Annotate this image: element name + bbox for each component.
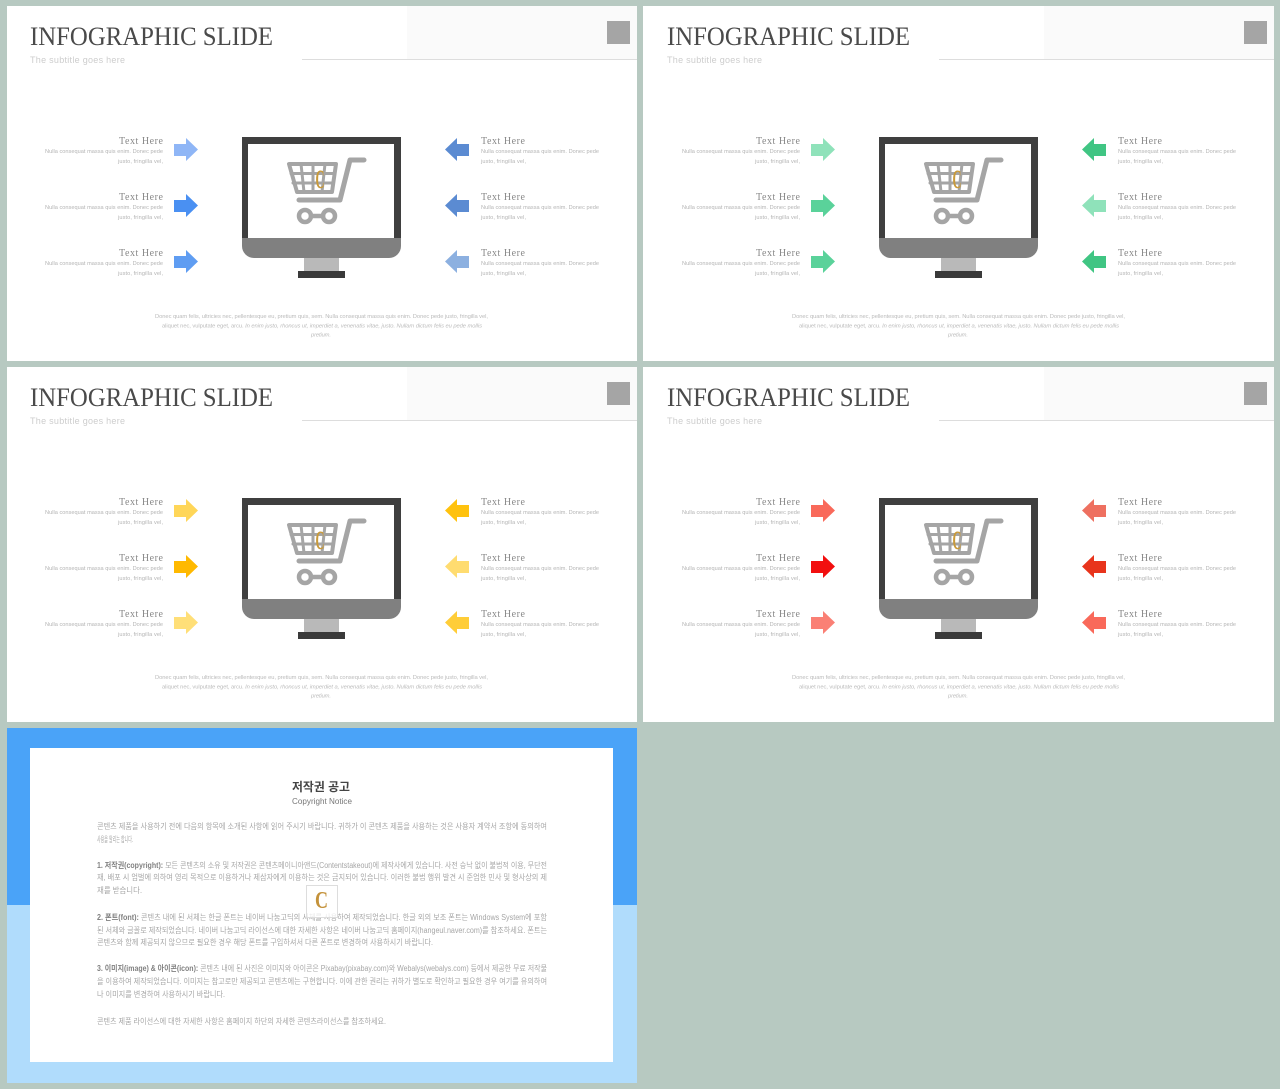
item right 3: justo, fringilla vel, (480, 632, 526, 638)
intro text (97, 821, 547, 844)
panel: yellow slide (7, 367, 637, 722)
item left 3: Text Here (119, 248, 164, 259)
item right 3 (445, 248, 599, 277)
item right 3 (445, 609, 599, 638)
item right 1 (445, 136, 599, 165)
item right 2: justo, fringilla vel, (480, 215, 526, 221)
item left 3: Nulla consequat massa quis enim. Donec pede (682, 622, 800, 628)
item left 2: Text Here (119, 192, 164, 203)
item right 2: Nulla consequat massa quis enim. Donec pede (1118, 205, 1236, 211)
item right 2 (1082, 192, 1236, 221)
title: INFOGRAPHIC SLIDE (667, 382, 910, 412)
item right 2: Text Here (1118, 553, 1163, 564)
footer text: Donec quam felis, ultricies nec, pellentesque eu, pretium quis, sem. Nulla consequat massa quis enim. Donec pede justo, fringilla vel, (155, 675, 488, 681)
item right 2: Text Here (1118, 192, 1163, 203)
grey square icon (1244, 382, 1267, 405)
item right 3 (1082, 609, 1236, 638)
intro text: 콘텐츠 제품을 사용하기 전에 다음의 항목에 소개된 사항에 읽어 주시기 바랍니다. 귀하가 이 콘텐츠 제품을 사용하는 것은 사용자 계약서 조항에 동의하여 (97, 821, 547, 831)
item left 1: Nulla consequat massa quis enim. Donec pede (682, 510, 800, 516)
panel: blue slide: C (316, 165, 324, 194)
item left 3 (682, 248, 835, 277)
footer text: aliquet nec, vulputate eget, arcu. In enim justo, rhoncus ut, imperdiet a, venenatis vitae, justo. Nullam dictum felis eu pede mollis (799, 684, 1119, 690)
item left 2: Text Here (119, 553, 164, 564)
item left 2: justo, fringilla vel, (754, 576, 800, 582)
panel: copyright notice slide (7, 728, 637, 1083)
icon: monitor with cart (242, 137, 401, 278)
footer text: aliquet nec, vulputate eget, arcu. In enim justo, rhoncus ut, imperdiet a, venenatis vitae, justo. Nullam dictum felis eu pede mollis (799, 324, 1119, 330)
footer text: Donec quam felis, ultricies nec, pellentesque eu, pretium quis, sem. Nulla consequat massa quis enim. Donec pede justo, fringilla vel, (792, 314, 1125, 320)
item left 1: justo, fringilla vel, (117, 520, 163, 526)
item left 3 (45, 609, 198, 638)
item left 1: justo, fringilla vel, (754, 159, 800, 165)
item right 2: Nulla consequat massa quis enim. Donec pede (481, 566, 599, 572)
title: INFOGRAPHIC SLIDE (30, 21, 273, 51)
item left 3 (45, 248, 198, 277)
item left 3: Text Here (119, 609, 164, 620)
item left 3: Nulla consequat massa quis enim. Donec pede (45, 622, 163, 628)
section: copyright: 재, 배포 시 엄벌에 의하여 영리 목적으로 이용하거나 제삼자에게 이용하는 것은 금지되어 있습니다. 이러한 불법 행위 발견 시 준엄한 민사 및 형사상의 제 (97, 872, 547, 882)
item left 3: justo, fringilla vel, (117, 632, 163, 638)
item right 3: justo, fringilla vel, (1117, 632, 1163, 638)
item left 2: justo, fringilla vel, (117, 576, 163, 582)
subtitle: The subtitle goes here (30, 416, 125, 426)
section: image and icon: 을 이용하여 제작되었습니다. 이미지는 참고로만 제공되고 콘텐츠에는 구현합니다. 이에 관한 권리는 귀하가 별도로 확인하고 필요한 경우 여기를 유의하여 (97, 976, 547, 986)
item left 2: Text Here (756, 553, 801, 564)
closing note: 콘텐츠 제품 라이선스에 대한 자세한 사항은 홈페이지 하단의 자세한 콘텐츠라이선스를 참조하세요. (97, 1016, 386, 1026)
item right 1: justo, fringilla vel, (480, 159, 526, 165)
footer text: pretium. (947, 332, 968, 338)
panel: red slide: C (952, 526, 962, 555)
item right 1: Text Here (481, 136, 526, 147)
title: INFOGRAPHIC SLIDE (667, 21, 910, 51)
item left 2 (682, 192, 835, 221)
item left 2 (45, 192, 198, 221)
panel: yellow slide: C (316, 526, 324, 555)
footer text: pretium. (310, 694, 331, 700)
item right 1 (1082, 136, 1236, 165)
panel: red slide (643, 367, 1274, 722)
item right 2 (445, 553, 599, 582)
item right 3: Text Here (481, 609, 526, 620)
item left 3: Text Here (756, 248, 801, 259)
item left 1 (682, 497, 835, 526)
footer text: aliquet nec, vulputate eget, arcu. In enim justo, rhoncus ut, imperdiet a, venenatis vitae, justo. Nullam dictum felis eu pede mollis (162, 684, 482, 690)
item left 2: justo, fringilla vel, (117, 215, 163, 221)
item right 2 (445, 192, 599, 221)
footer text: Donec quam felis, ultricies nec, pellentesque eu, pretium quis, sem. Nulla consequat massa quis enim. Donec pede justo, fringilla vel, (792, 675, 1125, 681)
watermark logo: C (315, 888, 328, 914)
item right 1: Nulla consequat massa quis enim. Donec pede (481, 149, 599, 155)
item right 1: Text Here (1118, 497, 1163, 508)
footer text (155, 314, 488, 338)
grey square icon (607, 21, 630, 44)
item left 1: justo, fringilla vel, (754, 520, 800, 526)
section: copyright (97, 860, 547, 895)
item left 1 (45, 136, 198, 165)
item left 3: justo, fringilla vel, (117, 271, 163, 277)
item left 2: Nulla consequat massa quis enim. Donec pede (682, 205, 800, 211)
item left 2: Nulla consequat massa quis enim. Donec pede (45, 205, 163, 211)
item left 3: Text Here (756, 609, 801, 620)
footer text (155, 675, 488, 700)
section: copyright: 재를 받습니다. (97, 885, 142, 895)
watermark logo (306, 886, 338, 918)
item right 1: Nulla consequat massa quis enim. Donec pede (1118, 149, 1236, 155)
item right 3: justo, fringilla vel, (480, 271, 526, 277)
item right 2: Text Here (481, 553, 526, 564)
subtitle: The subtitle goes here (30, 55, 125, 65)
item right 2: justo, fringilla vel, (1117, 576, 1163, 582)
heading: 저작권 공고 (292, 779, 350, 794)
item right 2: justo, fringilla vel, (480, 576, 526, 582)
item right 1: Text Here (1118, 136, 1163, 147)
panel: green slide (643, 6, 1274, 361)
footer text: pretium. (310, 332, 331, 338)
item left 1: Text Here (756, 136, 801, 147)
item left 1 (682, 136, 835, 165)
section: image and icon: 3. 이미지(image) & 아이콘(icon): 콘텐츠 내에 된 사진은 이미지와 아이콘은 Pixabay(pixabay.com)와 Webalys(webalys.com) 등에서 제공한 무료 저작물 (97, 963, 547, 973)
item left 3: justo, fringilla vel, (754, 632, 800, 638)
item left 1: Text Here (119, 497, 164, 508)
footer text: pretium. (947, 694, 968, 700)
item right 3: Nulla consequat massa quis enim. Donec pede (1118, 261, 1236, 267)
item left 1: Nulla consequat massa quis enim. Donec pede (682, 149, 800, 155)
item left 2 (45, 553, 198, 582)
item right 3: Nulla consequat massa quis enim. Donec pede (481, 261, 599, 267)
section: font: 콘텐츠와 함께 제공되지 않으므로 필요한 경우 해당 폰트를 구입하셔서 다른 폰트로 변경하여 사용하시기 바랍니다. (97, 937, 433, 947)
item right 2: justo, fringilla vel, (1117, 215, 1163, 221)
footer text: aliquet nec, vulputate eget, arcu. In enim justo, rhoncus ut, imperdiet a, venenatis vitae, justo. Nullam dictum felis eu pede mollis (162, 324, 482, 330)
panel: blue slide (7, 6, 637, 361)
item left 2: Text Here (756, 192, 801, 203)
icon: monitor with cart (879, 498, 1038, 639)
item right 1: justo, fringilla vel, (480, 520, 526, 526)
item right 3 (1082, 248, 1236, 277)
panel: green slide: C (952, 165, 962, 194)
grey square icon (1244, 21, 1267, 44)
item left 1 (45, 497, 198, 526)
item right 1 (1082, 497, 1236, 526)
item right 1: Nulla consequat massa quis enim. Donec pede (481, 510, 599, 516)
section: copyright: 1. 저작권(copyright): 모든 콘텐츠의 소유 및 저작권은 콘텐츠메이니아앤드(Contentstakeout)에 제작사에게 있습니다. 사전 승낙 없이 불법적 이용, 무단전 (97, 860, 547, 870)
item right 1 (445, 497, 599, 526)
section: font (97, 912, 548, 947)
item left 3: justo, fringilla vel, (754, 271, 800, 277)
footer text: Donec quam felis, ultricies nec, pellentesque eu, pretium quis, sem. Nulla consequat massa quis enim. Donec pede justo, fringilla vel, (155, 314, 488, 320)
item left 2: Nulla consequat massa quis enim. Donec pede (45, 566, 163, 572)
item right 1: justo, fringilla vel, (1117, 159, 1163, 165)
item left 1: Text Here (756, 497, 801, 508)
item left 2 (682, 553, 835, 582)
item left 2: Nulla consequat massa quis enim. Donec pede (682, 566, 800, 572)
item left 1: justo, fringilla vel, (117, 159, 163, 165)
icon: monitor with cart (242, 498, 401, 639)
item right 2: Nulla consequat massa quis enim. Donec pede (1118, 566, 1236, 572)
item left 1: Nulla consequat massa quis enim. Donec pede (45, 510, 163, 516)
section: font: 된 서체와 글꼴로 제작되었습니다. 네이버 나눔고딕 라이선스에 대한 자세한 사항은 네이버 나눔고딕 홈페이지(hangeul.naver.com)를 참조하세요. 폰트는 (97, 925, 547, 935)
item left 1: Nulla consequat massa quis enim. Donec pede (45, 149, 163, 155)
item right 2: Text Here (481, 192, 526, 203)
item left 2: justo, fringilla vel, (754, 215, 800, 221)
item right 2 (1082, 553, 1236, 582)
footer text (792, 675, 1125, 700)
item right 1: Text Here (481, 497, 526, 508)
item left 1: Text Here (119, 136, 164, 147)
item right 2: Nulla consequat massa quis enim. Donec pede (481, 205, 599, 211)
item right 3: Nulla consequat massa quis enim. Donec pede (481, 622, 599, 628)
title: INFOGRAPHIC SLIDE (30, 382, 273, 412)
item right 3: justo, fringilla vel, (1117, 271, 1163, 277)
item right 1: Nulla consequat massa quis enim. Donec pede (1118, 510, 1236, 516)
item left 3: Nulla consequat massa quis enim. Donec pede (45, 261, 163, 267)
section: image and icon: 나 이미지를 변경하여 사용하시기 바랍니다. (97, 989, 225, 999)
icon: monitor with cart (879, 137, 1038, 278)
item left 3 (682, 609, 835, 638)
item right 1: justo, fringilla vel, (1117, 520, 1163, 526)
intro text: 사용을 알리는 합니다. (97, 834, 133, 844)
footer text (792, 314, 1125, 338)
item right 3: Text Here (1118, 248, 1163, 259)
item right 3: Text Here (481, 248, 526, 259)
subheading: Copyright Notice (292, 796, 352, 806)
section: image and icon (97, 963, 547, 999)
subtitle: The subtitle goes here (667, 416, 762, 426)
item right 3: Text Here (1118, 609, 1163, 620)
item left 3: Nulla consequat massa quis enim. Donec pede (682, 261, 800, 267)
section: font: 2. 폰트(font): 콘텐츠 내에 된 서체는 한글 폰트는 네이버 나눔고딕의 서체를 사용하여 제작되었습니다. 한글 외의 보조 폰트는 Windows System에 포함 (97, 912, 548, 922)
grey square icon (607, 382, 630, 405)
item right 3: Nulla consequat massa quis enim. Donec pede (1118, 622, 1236, 628)
subtitle: The subtitle goes here (667, 55, 762, 65)
